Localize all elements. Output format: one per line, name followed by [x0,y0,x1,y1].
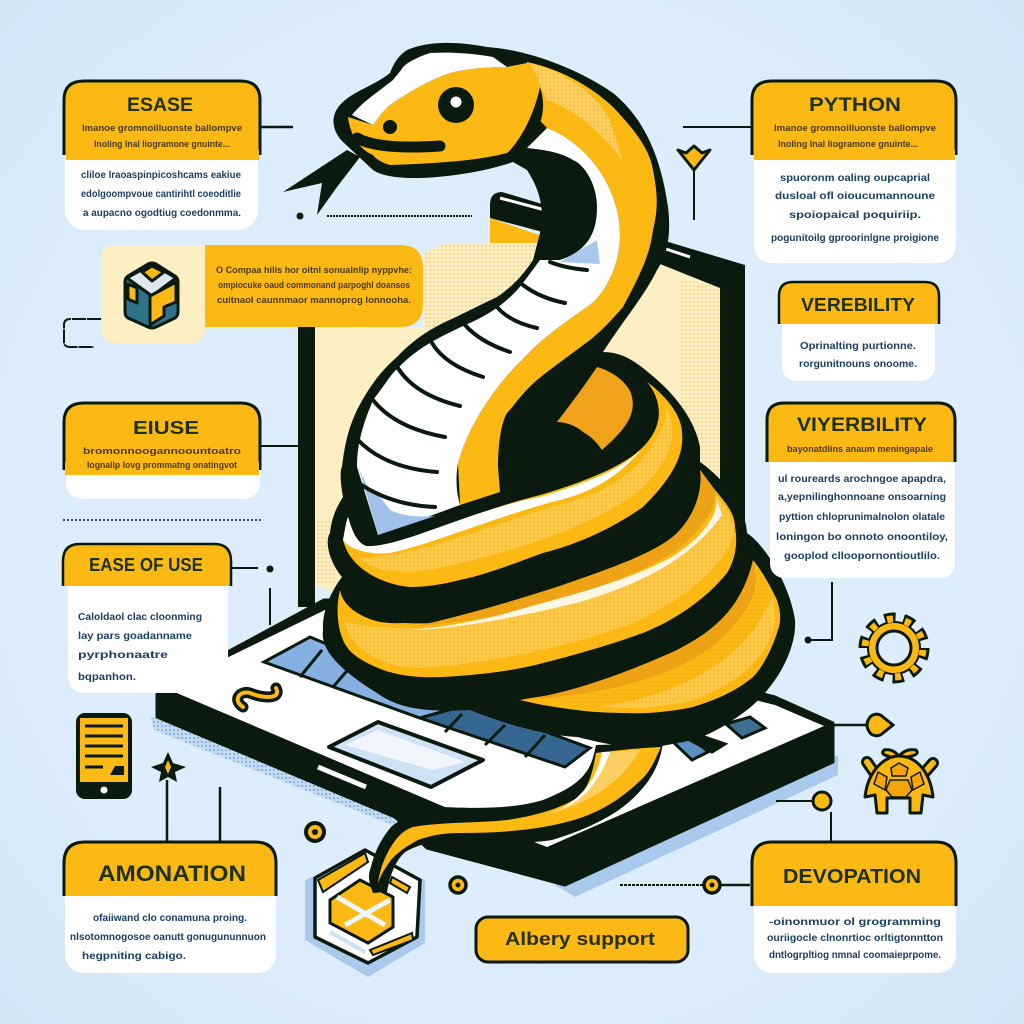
coil loop patch [557,367,633,450]
text block [83,446,241,471]
neck yellow band [458,62,657,505]
text block: nlsotomnogosoe oanutt gonugununnuon [70,932,266,943]
heading: VEREBILITY [801,295,915,315]
connector with dot [620,877,750,893]
text block [799,341,917,370]
text block: pyttion chloprunimalnolon olatale [779,512,945,523]
mouth line [357,138,440,147]
panel: PYTHON [752,81,956,263]
text block: bqpanhon. [78,672,136,683]
connector dot [450,877,466,893]
laptop front notch [318,767,366,787]
text block: O Compaa hilis hor oitnl sonualnlip nyppvhe: [216,265,412,276]
left laptop shadow [150,716,395,826]
text block: Oprinalting purtionne. [800,341,916,352]
connector [683,127,751,220]
laptop base [157,600,833,885]
text block: bayonatdiins anaum meningapaie [787,444,933,455]
dashed line [63,519,262,521]
text block: bromonnoogannoountoatro [83,446,241,457]
white belly [357,128,620,535]
dot and dashed line [296,212,472,220]
heading: EIUSE [133,418,199,438]
heading: ESASE [127,95,193,116]
text block: cuitnaol caunnmaor mannoprog lonnooha. [217,295,411,306]
panel: AMONATION [64,842,276,973]
snake [283,43,795,893]
connector [261,126,293,128]
pill: Albery support [476,917,688,962]
text block: ouriigocle clnonrtioc orltigtonntton [767,933,943,944]
text block: spuoronm oaling oupcaprial [780,173,930,184]
text block: lognallp lovg prommatng onatingvot [87,460,238,471]
pill: Albery support: Albery support [505,929,655,949]
connector [232,566,274,625]
ring marker [306,823,324,841]
panel: ESASE [64,81,260,230]
text block: rorgunitnouns onoome. [799,359,917,370]
text block: Caloldaol clac cloonming [78,612,202,623]
heading: AMONATION [98,861,246,886]
head [283,53,543,215]
text block: lmanoe gromnoilluonste ballompve [774,123,936,134]
heading: EASE OF USE [89,555,203,575]
laptop screen [298,192,745,607]
text block: edolgoompvoue cantirihtl coeoditlie [81,189,241,200]
icon: gear [865,619,923,677]
tongue [283,150,360,215]
text block [776,444,948,562]
text block: ul roureards arochngoe apapdra, [778,474,946,485]
text block: gooplod clloopornontioutlilo. [784,551,940,562]
connector [804,582,832,644]
icon: turtle [865,750,933,813]
text block: -oinonmuor ol grogramming [769,917,941,928]
connector [261,445,298,447]
text block: a aupacno ogodtiug coedonmma. [83,208,241,219]
eye [438,87,474,123]
text block: lay pars goadanname [78,631,192,642]
coil band 2 [338,470,736,677]
laptop [150,192,838,897]
text block: hegpniting cabigo. [82,951,186,962]
coil band 3 [520,560,780,713]
bracket connector [64,319,101,347]
text block: lnoling lnal liogramone gnuinte... [94,139,230,150]
text block [216,265,412,306]
text block: pogunitoilg gproorinlgne proigione [771,233,939,244]
text block: loningon bo onnoto onoontiloy, [776,532,948,543]
snake black silhouette [323,43,795,747]
text block [81,123,242,219]
keyboard [264,637,765,767]
icon: hexagon logo [305,850,425,977]
icon: star with stem [151,752,220,842]
icon: cube [125,263,178,328]
text block: ofaiiwand clo conamuna proing. [93,913,247,924]
panel: EIUSE [64,403,260,499]
coil band 1 [343,382,682,587]
panel: cube callout [101,245,423,343]
text block: dntlogrpltiog nmnal coomaieprpome. [769,950,941,961]
right laptop shadow [555,755,838,897]
text block: spoiopaical poquiriip. [789,210,921,221]
connector with dot [776,792,831,842]
connector with marker [832,714,893,736]
text block: lmanoe gromnoilluonste ballompve [82,123,242,134]
panel: EASE OF USE [63,544,231,693]
text block: dusloal ofl oioucumannoune [775,191,936,202]
text block: ompiocuke oaud commonand parpoghl doansos [218,280,410,291]
text block [767,917,943,961]
snake tail [369,743,663,893]
heading: VIYERBILITY [797,415,927,436]
panel: VEREBILITY [779,282,939,381]
panel: VIYERBILITY [767,403,955,578]
icon: diamond marker [678,146,710,170]
squiggle logo [238,688,277,707]
trackpad [329,722,483,787]
heading: DEVOPATION [783,866,921,888]
text block [70,913,266,962]
heading: PYTHON [809,95,901,116]
text block [78,612,202,683]
text block: cliloe lraoaspinpicoshcams eakiue [81,170,241,181]
text block: lnoling lnal liogramone gnuinte... [778,139,918,150]
text block [771,123,939,244]
nostril [383,120,397,134]
icon: tablet [76,713,132,799]
panel: DEVOPATION [752,842,956,973]
text block: a,yepnilinghonnoane onsoarning [778,492,946,503]
dotted neck shading [530,63,622,160]
text block: pyrphonaatre [78,650,169,661]
